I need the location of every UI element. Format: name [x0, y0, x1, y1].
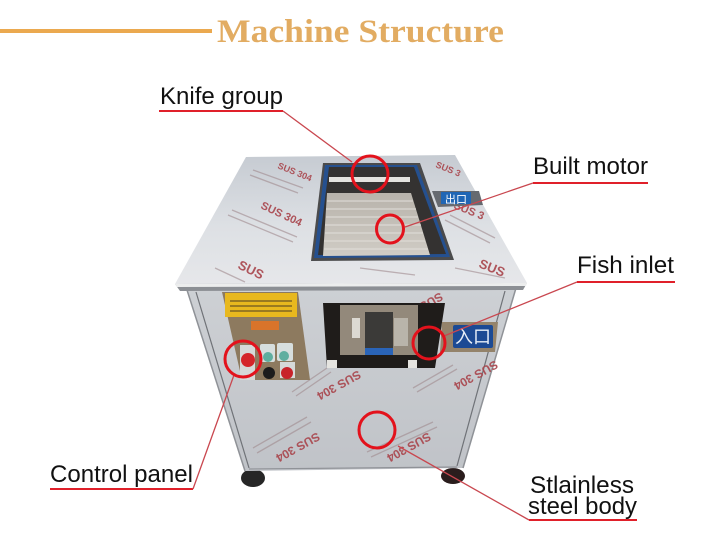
machine illustration [175, 155, 527, 487]
SUS 304 top stamps: SUS 3 [434, 160, 462, 179]
inlet sign: 入口 [455, 327, 491, 347]
warning label [225, 293, 297, 317]
label: Fish inlet: Fish inlet [577, 252, 674, 279]
SUS 304 body stamps: SUS 304 [384, 429, 433, 465]
SUS 304 body stamps: SUS 304 [273, 429, 322, 465]
label: Stainless steel body: steel body [528, 493, 637, 520]
wheels [241, 468, 465, 487]
control plate [222, 292, 310, 380]
label: Knife group [159, 83, 388, 192]
outlet sign [432, 191, 483, 207]
label: Fish inlet [413, 252, 675, 359]
label: Control panel [50, 341, 261, 489]
machine top panel [175, 155, 527, 291]
SUS 304 top stamps: SUS [477, 256, 508, 280]
inlet sign [440, 322, 498, 352]
SUS 304 top stamps: SUS 3 [452, 200, 486, 223]
label: Stainless steel body [359, 412, 637, 520]
SUS 304 top stamps: SUS 304 [259, 200, 305, 230]
SUS 304 body stamps: SUS 304 [451, 357, 500, 393]
SUS 304 body stamps: SUS 304 [314, 367, 363, 403]
SUS 304 top stamps [215, 160, 508, 283]
SUS 304 body stamps: SUS [417, 289, 445, 314]
SUS 304 top stamps: SUS [236, 257, 267, 283]
label: Stainless steel body: Stlainless [530, 472, 634, 499]
label: Knife group: Knife group [160, 83, 283, 110]
SUS 304 top stamps: SUS 304 [276, 161, 313, 183]
label: Built motor [376, 153, 648, 243]
outlet sign: 出口 [445, 192, 467, 206]
label: Built motor: Built motor [533, 153, 648, 180]
buttons [240, 343, 295, 380]
header rule [0, 29, 212, 33]
SUS 304 body stamps [253, 289, 500, 465]
hopper window [311, 163, 454, 261]
title: Machine Structure [217, 14, 504, 50]
small orange label [251, 321, 279, 330]
machine body panel [187, 288, 516, 471]
machine opening [323, 303, 445, 368]
label: Control panel: Control panel [50, 461, 193, 488]
